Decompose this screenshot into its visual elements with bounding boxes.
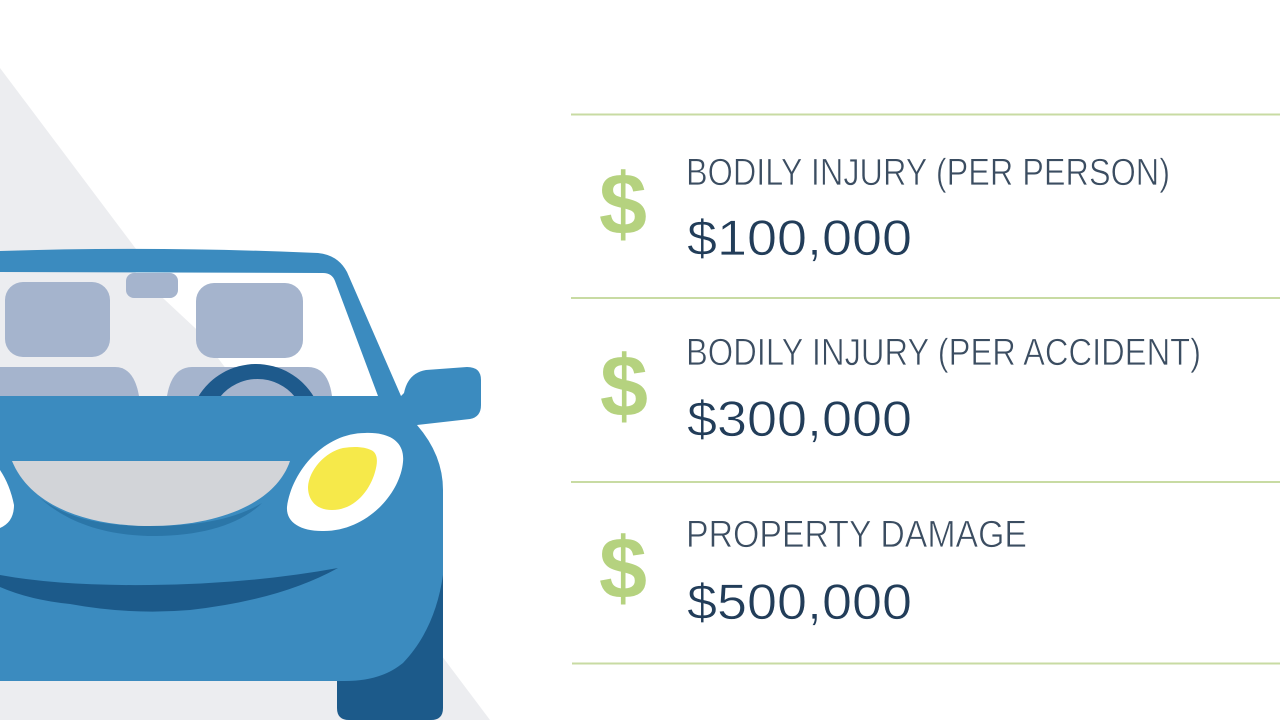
left seat [0,367,139,396]
icon: dollar sign: $ [599,520,647,617]
rear-view mirror [126,273,178,298]
car body [0,249,481,681]
grille shadow [40,498,262,536]
right seat [167,367,332,396]
divider lines [571,114,1280,664]
front wheel [337,560,443,720]
amount: $100,000 [687,210,912,266]
label: BODILY INJURY (PER ACCIDENT) [686,332,1201,374]
left headrest [5,282,110,357]
steering wheel [198,364,314,397]
windshield glass [135,272,380,396]
bumper smile [0,568,338,612]
right headlight [287,433,403,531]
label: BODILY INJURY (PER PERSON) [686,152,1170,194]
background triangle [0,68,490,720]
headlight lens [308,447,377,510]
amount: $300,000 [687,391,912,447]
icon: dollar sign: $ [600,338,648,435]
amount: $500,000 [687,574,912,630]
right headrest [196,283,303,358]
row: bodily injury per person [599,152,1170,266]
label: PROPERTY DAMAGE [686,514,1027,556]
icon: car [0,249,481,720]
row: bodily injury per accident [600,332,1201,447]
left headlight [0,470,14,528]
grille [12,461,290,526]
icon: dollar sign: $ [599,156,647,253]
row: property damage [599,514,1027,630]
